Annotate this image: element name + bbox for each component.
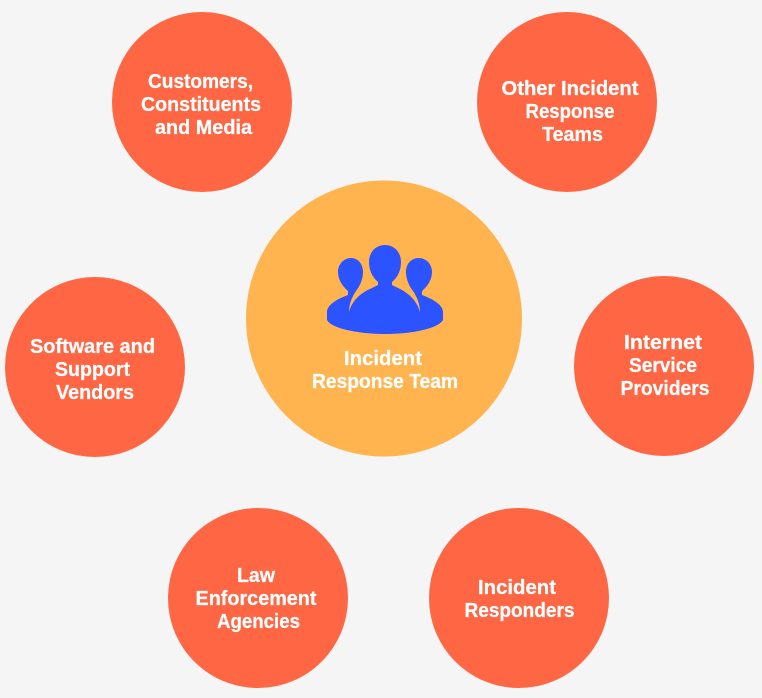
panel: law enforcement agencies: Enforcement xyxy=(196,588,317,610)
panel: customers, constituents and media: Constituents xyxy=(141,94,261,116)
panel: software and support vendors: Support xyxy=(55,359,130,381)
panel: internet service providers: Service xyxy=(629,355,697,377)
label: incident response team: Incident xyxy=(344,348,422,370)
panel: customers, constituents and media: Customers, xyxy=(148,71,253,93)
panel: internet service providers: Providers xyxy=(620,378,710,400)
panel: customers, constituents and media xyxy=(112,12,292,192)
panel: law enforcement agencies xyxy=(168,508,348,688)
panel: internet service providers xyxy=(574,276,754,456)
panel: software and support vendors: Software and xyxy=(30,336,155,358)
panel: software and support vendors xyxy=(5,277,185,457)
panel: law enforcement agencies: Agencies xyxy=(217,611,300,633)
panel: other incident response teams: Response xyxy=(526,101,614,123)
panel: software and support vendors: Vendors xyxy=(56,382,134,404)
panel: incident responders: Responders xyxy=(464,600,574,622)
panel: other incident response teams: Other Incident xyxy=(502,78,639,100)
label: incident response team: Response Team xyxy=(312,371,458,393)
panel: central circle incident response team xyxy=(246,180,522,456)
panel: incident responders: Incident xyxy=(478,577,556,599)
icon: team of three people xyxy=(327,245,443,334)
panel: law enforcement agencies: Law xyxy=(237,565,275,587)
panel: other incident response teams xyxy=(477,12,657,192)
panel: internet service providers: Internet xyxy=(624,332,702,354)
panel: incident responders xyxy=(429,508,609,688)
panel: other incident response teams: Teams xyxy=(542,124,603,146)
label: incident response team xyxy=(312,348,458,393)
panel: customers, constituents and media: and Media xyxy=(155,117,253,139)
